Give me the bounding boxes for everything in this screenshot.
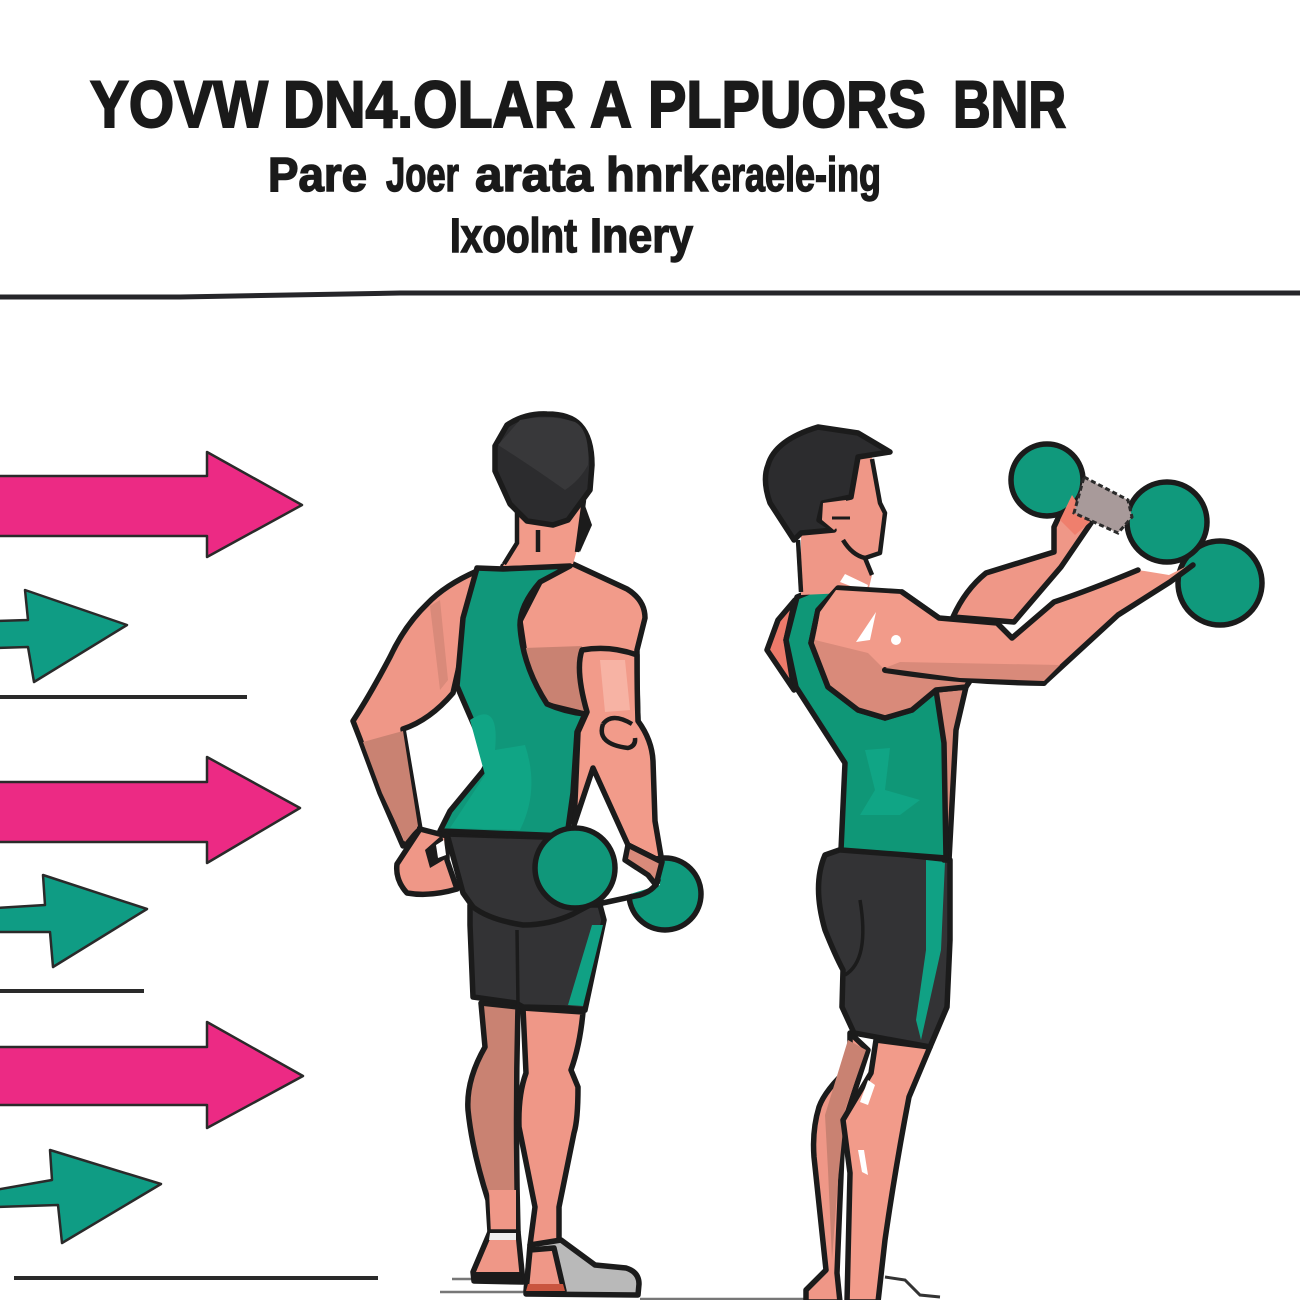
subtitle line 1: hnrk [606,149,708,202]
beard [576,500,592,552]
figure: back view with dumbbell [353,414,810,1299]
title: YOVW [90,67,269,141]
ear [822,500,848,530]
shorts hips [447,834,590,925]
title: PLPUORS [648,67,926,141]
rule 1 [0,695,247,699]
subtitle line 1: Pare [268,149,367,202]
front leg [843,1040,930,1300]
left foot [473,1232,523,1282]
arrow: teal 3 [0,1150,161,1243]
neck [503,490,585,566]
ground lines [440,1279,810,1299]
shorts [470,905,604,1010]
dumbbell [629,858,701,930]
dumbbell near [1127,482,1207,562]
highlight [856,612,876,642]
face [820,455,885,558]
hair [495,414,592,525]
subtitle line 2 [450,210,693,263]
subtitle line 1: Joer [386,149,459,202]
arrow: pink 2 [0,757,300,863]
back strip [767,600,795,690]
arrow: teal 1 [0,590,127,682]
subtitle line 2: Ixoolnt [450,210,577,263]
dumbbell far [1178,541,1262,625]
hair [765,427,890,540]
tank top [786,580,946,858]
title [90,67,1066,141]
left arm [353,571,477,846]
right leg [519,1008,583,1245]
subtitle line 1: eraele-ing [711,149,881,202]
arrow: teal 2 [0,875,147,967]
figure: side view raising dumbbells [765,427,1262,1300]
front arm [815,563,1193,683]
right arm [574,648,662,862]
upper back [503,564,645,721]
arrow: pink 3 [0,1022,303,1128]
rule 2 [0,989,144,993]
subtitle line 1 [268,149,881,202]
shorts [818,848,950,1047]
neck [801,530,872,595]
left hand [397,829,457,894]
title: DN4.OLAR [283,67,575,141]
chest and shoulder [811,588,997,718]
arrow: pink 1 [0,452,302,557]
hand [1060,495,1090,535]
rear arm [953,497,1091,622]
shoe [526,1240,639,1295]
left leg [468,1003,518,1232]
skin side strip [936,687,966,860]
laces [885,1277,940,1297]
title: BNR [953,67,1066,141]
subtitle line 1: arata [475,149,593,202]
tank top [440,566,585,836]
back leg [806,1033,868,1300]
glove [1074,477,1132,533]
subtitle line 2: Inery [590,210,693,263]
title: A [590,67,632,141]
rule 3 [14,1276,378,1280]
